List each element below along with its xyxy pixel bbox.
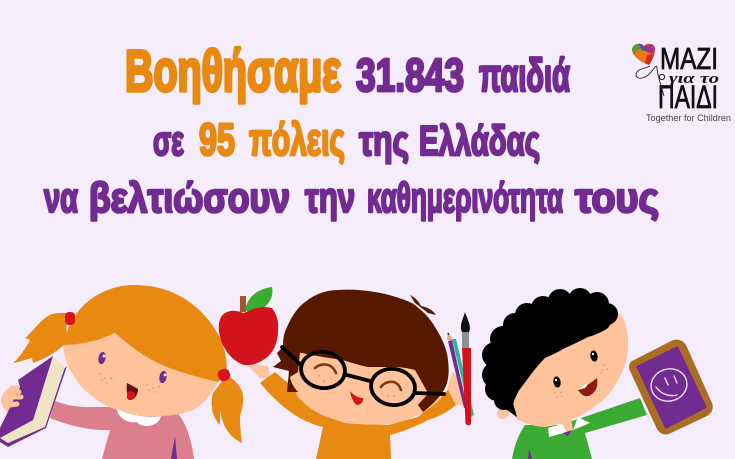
boy hands [248, 365, 271, 378]
boy curly hair [482, 288, 618, 417]
girl face [63, 330, 218, 416]
boy hair [283, 290, 449, 412]
girl sweater and arm [50, 401, 194, 459]
girl mouth [127, 383, 138, 400]
sweater fold [171, 436, 177, 459]
pencils [447, 332, 474, 417]
heading: second line: σε [153, 117, 184, 164]
logo: Mazi gia to Paidi: για το [669, 71, 719, 87]
boy glasses [282, 347, 444, 408]
boy face [507, 313, 628, 427]
heading: first line: παιδιά [479, 49, 570, 101]
boy eyes [315, 364, 401, 390]
smiley [647, 365, 691, 405]
fingers [10, 388, 21, 405]
girl right pigtail [212, 375, 243, 443]
logo: Mazi gia to Paidi [632, 41, 731, 123]
logo: Mazi gia to Paidi: ΜΑΖΙ [660, 41, 718, 76]
boy freckles [318, 375, 395, 397]
boy green sweater [512, 398, 647, 459]
heading: second line: πόλεις [249, 114, 345, 165]
girl eyes [97, 351, 168, 384]
boy face [283, 330, 442, 425]
boy freckles [554, 364, 608, 398]
boy mouth [350, 391, 363, 405]
illustration: boy with slate [482, 288, 713, 459]
illustration: boy with glasses [248, 290, 474, 459]
boy hair tuft [410, 295, 436, 315]
girl hand [1, 385, 23, 414]
heading: second line: της [359, 117, 409, 164]
boy orange top [260, 372, 456, 459]
heading: second line [153, 114, 540, 165]
hair ties [65, 312, 232, 383]
heading: third line: βελτιώσουν [89, 174, 290, 221]
paintbrush [461, 312, 471, 425]
girl hair [63, 285, 227, 382]
girl collar [117, 409, 161, 426]
heading: second line: Ελλάδας [419, 117, 540, 164]
sweater fold [528, 448, 532, 459]
slate board [629, 340, 713, 434]
boy ear [497, 407, 509, 419]
boy sideburn [273, 347, 300, 392]
illustration: girl with book [0, 285, 243, 459]
heading: third line: καθημερινότητα [367, 174, 563, 221]
heading: second line: 95 [199, 114, 235, 165]
heading: third line: να [44, 174, 78, 221]
heading: third line: τους [575, 174, 659, 221]
illustration: red apple [219, 287, 278, 365]
girl freckles [99, 373, 160, 393]
heading: third line: την [305, 174, 355, 221]
boy mouth [578, 378, 597, 396]
heading: third line [44, 174, 659, 221]
heading: first line: 31.843 [356, 49, 464, 101]
icon: puzzle heart balloon [632, 44, 664, 96]
girl left pigtail [13, 313, 67, 363]
purple book [0, 356, 67, 447]
boy eyes [552, 350, 599, 388]
logo: Mazi gia to Paidi: Together for Children [646, 113, 731, 123]
boy collar [548, 417, 590, 437]
heading: first line: Βοηθήσαμε [125, 39, 341, 104]
